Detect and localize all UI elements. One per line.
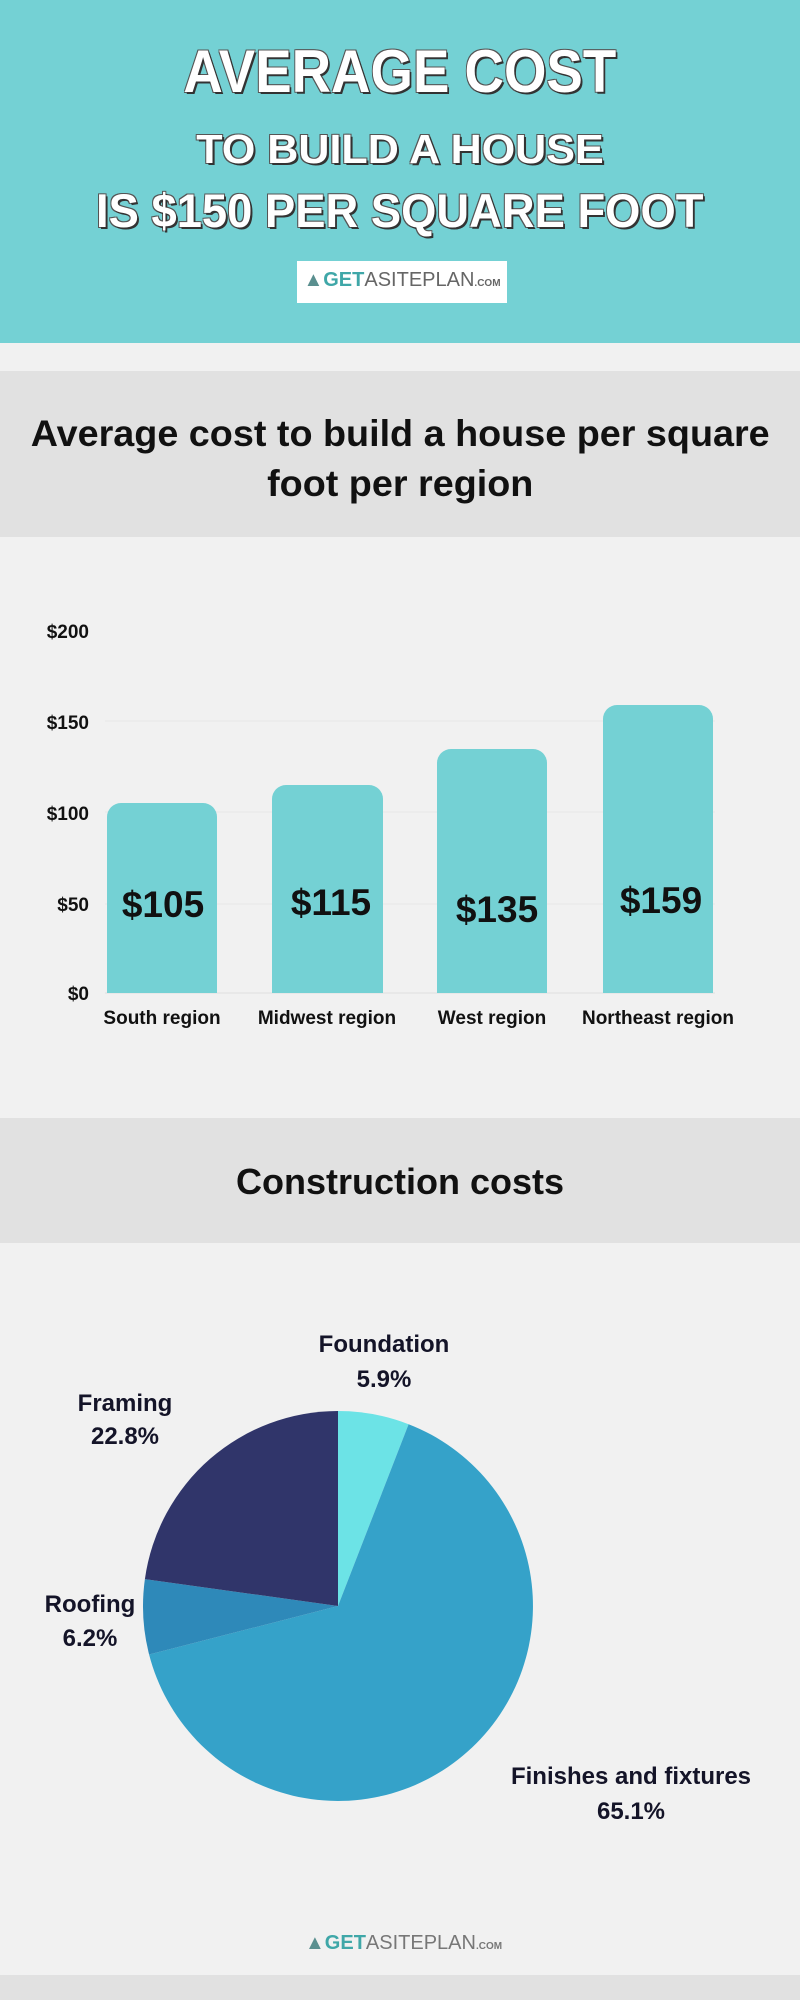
label: finishes (511, 1763, 751, 1825)
title line 2: TO BUILD A HOUSE (196, 126, 604, 172)
header banner (0, 0, 800, 343)
slice: roofing (143, 1579, 338, 1654)
logo: ▲GETASITEPLAN.COM (303, 269, 501, 291)
label: framing: 22.8% (91, 1423, 159, 1450)
bar: midwest: $115 (291, 882, 371, 923)
label: roofing: Roofing (45, 1591, 135, 1618)
section title: foot per region (267, 463, 533, 504)
category labels: Midwest region (258, 1008, 396, 1029)
label: foundation (319, 1331, 449, 1393)
title line 1: AVERAGE COST (184, 38, 616, 105)
logo (297, 261, 507, 303)
slice: finishes (149, 1424, 533, 1801)
y axis labels (47, 622, 89, 1005)
label: roofing: 6.2% (63, 1625, 117, 1652)
category labels: Northeast region (582, 1008, 734, 1029)
label: foundation: 5.9% (357, 1366, 411, 1393)
y axis labels: $100 (47, 804, 89, 825)
label: foundation: Foundation (319, 1331, 449, 1358)
y axis labels: $200 (47, 622, 89, 643)
y axis labels: $150 (47, 713, 89, 734)
label: finishes: 65.1% (597, 1798, 665, 1825)
bar: northeast (603, 705, 713, 993)
y axis labels: $0 (68, 984, 89, 1005)
bar: midwest (272, 785, 383, 993)
category labels (103, 1008, 734, 1029)
bar chart (47, 622, 734, 1029)
pie chart (45, 1331, 751, 1825)
bar: west: $135 (456, 889, 538, 930)
section title: Average cost to build a house per square (31, 413, 769, 454)
slice: framing (145, 1411, 338, 1606)
label: roofing (45, 1591, 135, 1652)
slice: foundation (338, 1411, 409, 1606)
section title (31, 413, 769, 504)
bar: northeast: $159 (620, 880, 702, 921)
section header: regional cost (0, 371, 800, 537)
bar: south: $105 (122, 884, 204, 925)
section title: Construction costs (236, 1161, 564, 1202)
label: framing (78, 1390, 172, 1450)
label: framing: Framing (78, 1390, 172, 1417)
bar: west (437, 749, 547, 993)
title line 3: IS $150 PER SQUARE FOOT (96, 184, 704, 237)
category labels: South region (103, 1008, 221, 1029)
category labels: West region (438, 1008, 546, 1029)
label: finishes: Finishes and fixtures (511, 1763, 751, 1790)
footer logo: ▲GETASITEPLAN.COM (305, 1932, 502, 1954)
section header: construction costs (0, 1118, 800, 1243)
y axis labels: $50 (57, 895, 89, 916)
bar: south (107, 803, 217, 993)
footer strip (0, 1975, 800, 2000)
